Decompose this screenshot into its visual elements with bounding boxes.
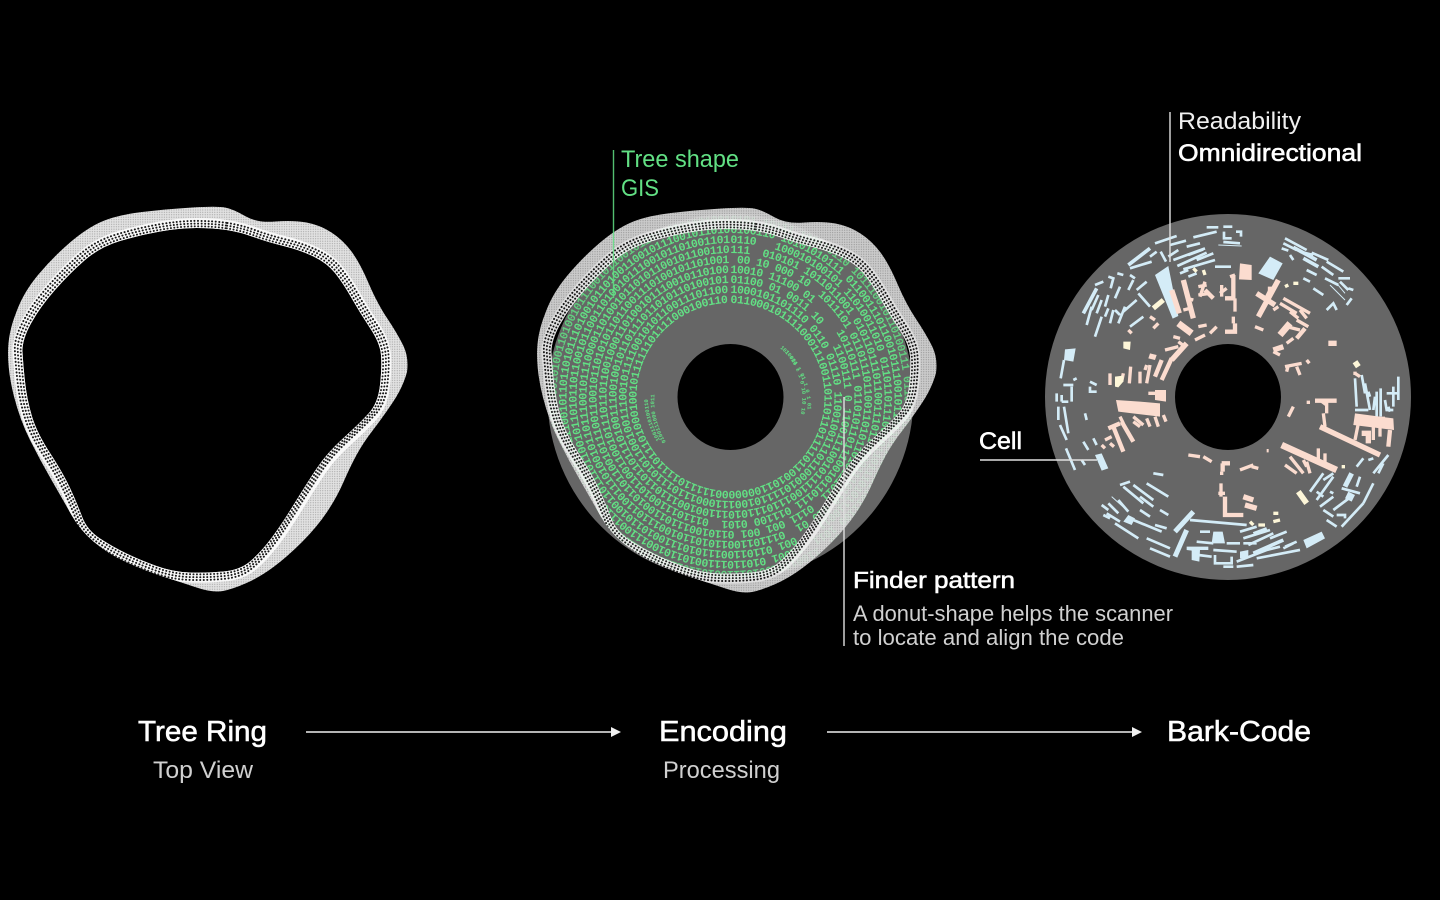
step label: Encoding [659, 716, 787, 784]
binary data rings: 1000101101110 0110 01110 11001001110110001011110100111000111011101011001001110010111100101011001110110011010010110100110100101 [618, 285, 842, 509]
step label: Encoding: Encoding [659, 716, 787, 748]
label: Tree shape GIS: Tree shape [621, 146, 739, 173]
green leader line [612, 150, 614, 298]
binary data rings: 1001110100110 [644, 400, 660, 442]
binary data rings: 0100110 10101010111 0110011101100101110010110110111001011011100 1011 11001 0101101110010110100111001110110100101101110010110110101110100101101001100101110010110100101101001011 [558, 226, 902, 569]
data cells [1057, 227, 1398, 567]
step label: Tree Ring: Tree Ring [138, 716, 267, 748]
leader line [843, 397, 845, 646]
label: Finder pattern: A donut-shape helps the scanner [853, 601, 1173, 626]
binary data rings: 11010 0101 1001 0110 101110 01101 1100 101 0011 1010 0111 1001 01101 0101 1110 0011 0101 0110 01011 10010 1101 0011 0101 1011 0010 11010 0110 1011 10010 01101 0010 10111 01001 10100 1011 01001 10101 1001 01101 0010 1101 01001 10011 01011 [552, 306, 910, 362]
encoding tree-ring overlay [529, 191, 949, 611]
label: Readability Omnidirectional [1170, 108, 1362, 262]
step label: Tree Ring: Top View [153, 757, 254, 784]
encoding diagram [537, 208, 936, 592]
label: Cell: Cell [979, 428, 1022, 455]
step label: Bark-Code: Bark-Code [1167, 716, 1311, 748]
binary data rings: 0110 100010100101 11010011010 011011011100101101110101110011 001 0110110011101011100101101001101110110010110101101100101100110100101110010110100110100101101011001 [568, 235, 892, 559]
leader line [1169, 112, 1171, 262]
cream mid cells [1115, 268, 1358, 525]
leader line [980, 459, 1097, 461]
binary data rings: 101 001 1 01 1 0 1 01 [780, 346, 812, 410]
label: Finder pattern: to locate and align the code [853, 625, 1124, 650]
label: Finder pattern [844, 397, 1173, 650]
binary data rings: 0110001011110001110011011011011110110010110000000111110111101110100010010111111011110001001101000110100101110010 [628, 295, 832, 499]
binary data rings: 0101 10111 100110110 101110010110100111 011001011011100101110011011 01 110011010010111001011011100101110100101101011001001110101100101001101001011100101100101101001011010010110100110101110 [549, 216, 912, 578]
label: Tree shape GIS [614, 146, 739, 298]
binary data rings: 10010 11100 01 10110111 0110101101110010110111 011100 0101 01110111001011001100101110110110010001101001011100101101001101011001011100101 [598, 265, 862, 529]
pink inner cells [1102, 263, 1394, 515]
tree ring: top view mesh [0, 190, 420, 610]
bark-code disc [1045, 214, 1411, 580]
label: Cell [979, 428, 1097, 460]
binary data rings: 01100 01 0011 10 1100111 0 11001110010111100111011101011100100111011011011101001110010010110111011010110100101101001110101100101101 [608, 275, 852, 519]
step label: Encoding: Processing [663, 757, 780, 784]
arrow: tree ring to encoding [306, 727, 621, 737]
label: Finder pattern: Finder pattern [853, 567, 1015, 593]
label: Tree shape GIS: GIS [621, 175, 659, 202]
binary data rings: 111 010101 1011011001 0101101110110011101101001110110 010 01 0111011001101011010011101100111010010110111001011100001101001011010110010110011010110101110010110 [578, 245, 882, 549]
encoding disc with finder hole [548, 214, 914, 580]
step label: Tree Ring [138, 716, 267, 784]
binary data rings: 00 10 000 10 1011101 0110111011001101011010111011 0111 001 001 01101001110110010110110010111001100101101010110110011101001011010010110101100101 [588, 256, 872, 539]
blue outer cells [1057, 227, 1398, 567]
label: Readability Omnidirectional: Readability [1178, 108, 1301, 135]
arrow: encoding to bark-code [827, 727, 1142, 737]
label: Readability Omnidirectional: Omnidirectional [1178, 140, 1362, 167]
disc with finder hole [1045, 214, 1411, 580]
binary data rings [549, 216, 912, 578]
binary data rings: 10010 1 1 0 10 10 10 1100 [785, 350, 806, 414]
binary data rings: 0100111000 1011 [650, 394, 666, 444]
